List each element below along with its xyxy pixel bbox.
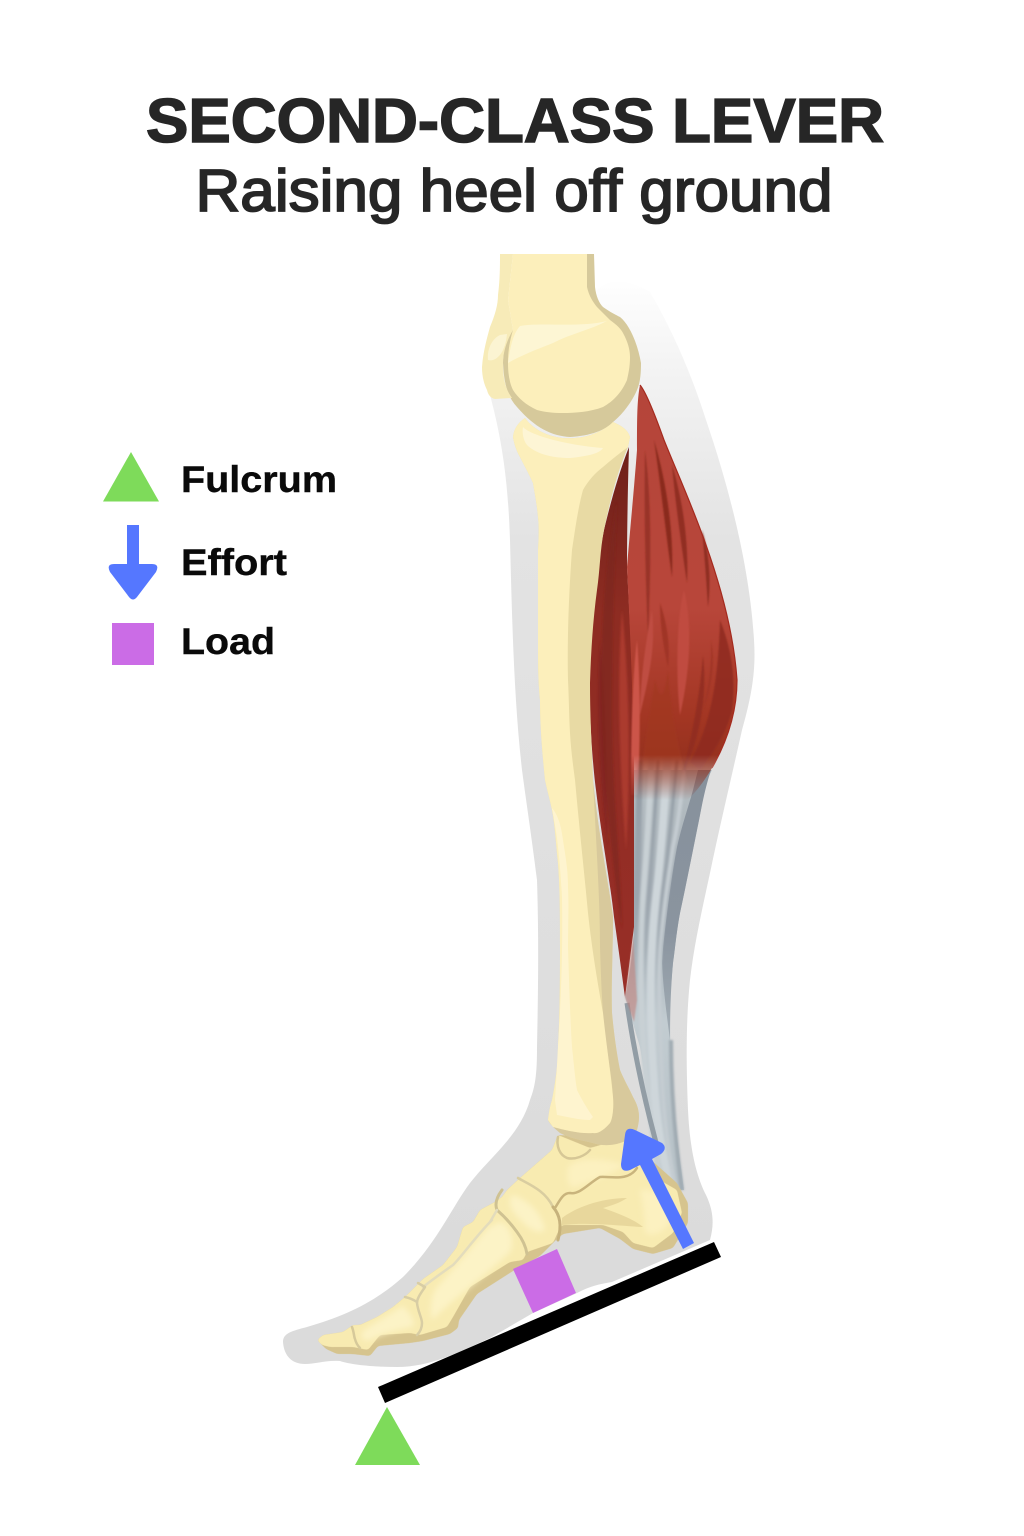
tibia mid-shade base xyxy=(513,418,639,1145)
calcaneus shading xyxy=(562,1198,643,1227)
legend xyxy=(103,452,337,665)
legend: load label: Load xyxy=(181,620,275,662)
legend: fulcrum label: Fulcrum xyxy=(181,458,337,500)
tibia xyxy=(513,418,639,1145)
tendon soft fibres xyxy=(636,750,685,1190)
load square on lever xyxy=(513,1249,576,1313)
effort arrow xyxy=(621,1129,694,1249)
tendon dark outer band xyxy=(662,770,711,1040)
foot sutures xyxy=(352,1137,637,1348)
soleus muscle xyxy=(589,447,637,1022)
foot shaded rim xyxy=(317,1135,688,1356)
gastrocnemius muscle xyxy=(627,385,737,805)
fulcrum triangle xyxy=(355,1407,420,1465)
legend: load square xyxy=(112,623,154,665)
femur shaded back xyxy=(503,254,641,437)
tibia shaft highlight xyxy=(552,808,593,1120)
legend: effort arrow xyxy=(109,525,157,600)
femur xyxy=(482,254,641,437)
title: SECOND-CLASS LEVER xyxy=(146,87,884,156)
tendon xyxy=(625,750,712,1190)
femur lit surface xyxy=(508,254,630,413)
gastrocnemius fibres xyxy=(631,440,734,795)
legend: effort label: Effort xyxy=(181,541,288,583)
tibia head highlight xyxy=(523,427,603,458)
phalanx highlight xyxy=(361,1306,414,1341)
leg and foot anatomy xyxy=(283,254,754,1465)
femur pale lateral part xyxy=(482,254,513,399)
tarsal highlight xyxy=(510,1195,545,1232)
subtitle: Raising heel off ground xyxy=(196,158,832,224)
foot bones xyxy=(317,1135,688,1356)
tendon left edge band xyxy=(627,1003,658,1150)
legend: fulcrum triangle xyxy=(103,452,159,502)
skin silhouette xyxy=(283,282,754,1367)
femur highlight xyxy=(508,321,607,363)
foot lit surface xyxy=(317,1135,682,1350)
gastrocnemius light streak xyxy=(631,640,640,795)
lateral condyle highlight xyxy=(488,334,507,360)
tibia tan edge xyxy=(553,780,639,1145)
soleus fibres xyxy=(598,500,629,930)
lever bar xyxy=(378,1242,721,1403)
tibia lit surface xyxy=(513,418,630,1133)
metatarsal highlight xyxy=(431,1222,512,1320)
soleus fading tip xyxy=(625,935,637,1022)
